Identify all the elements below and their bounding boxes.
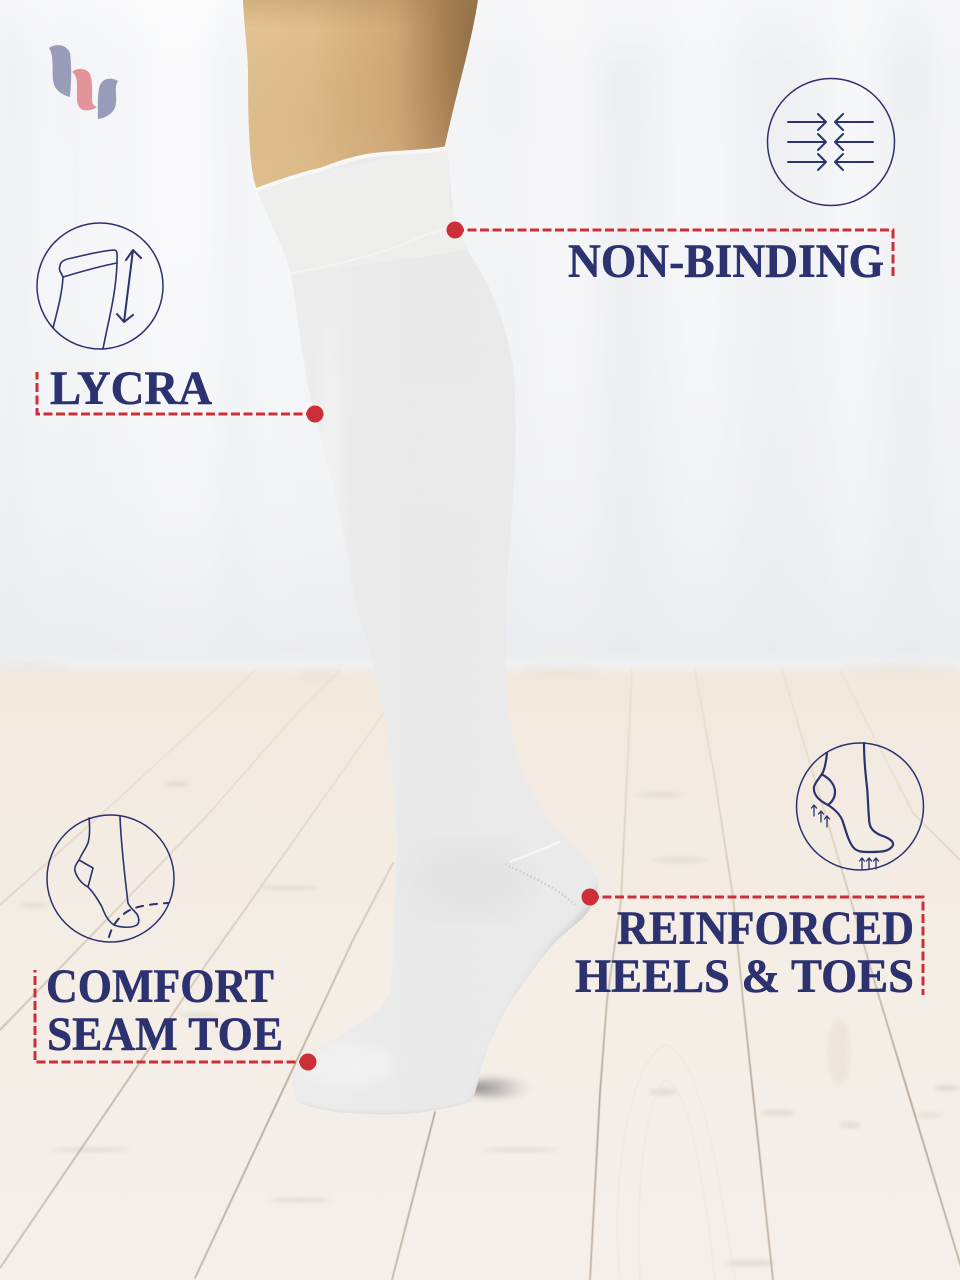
background: wooden floor: [0, 658, 960, 1280]
callout: lycra: LYCRA: [50, 362, 212, 415]
background: curtain wall: [0, 0, 960, 680]
callout: reinforced heels and toes: REINFORCED: [617, 902, 914, 955]
callout: non-binding: [446, 222, 893, 288]
callout: comfort seam toe: SEAM TOE: [47, 1008, 283, 1061]
callout: comfort seam toe: COMFORT: [46, 960, 274, 1013]
callout: non-binding: NON-BINDING: [568, 235, 884, 288]
icon: comfort seam toe: [47, 815, 174, 942]
sock: [256, 146, 598, 1114]
callout: lycra: [37, 362, 324, 422]
icon: non-binding arrows: [768, 78, 894, 206]
callout: comfort seam toe: [35, 960, 316, 1070]
leg: [243, 0, 478, 190]
callout: reinforced heels and toes: HEELS & TOES: [575, 950, 914, 1003]
logo: [49, 45, 118, 119]
floor shadow under heel: [466, 1079, 534, 1097]
callout: reinforced heels and toes: [575, 888, 923, 1003]
icon: lycra stretch: [37, 223, 163, 349]
wood knot: [617, 1018, 851, 1280]
icon: reinforced heels and toes: [796, 743, 924, 870]
